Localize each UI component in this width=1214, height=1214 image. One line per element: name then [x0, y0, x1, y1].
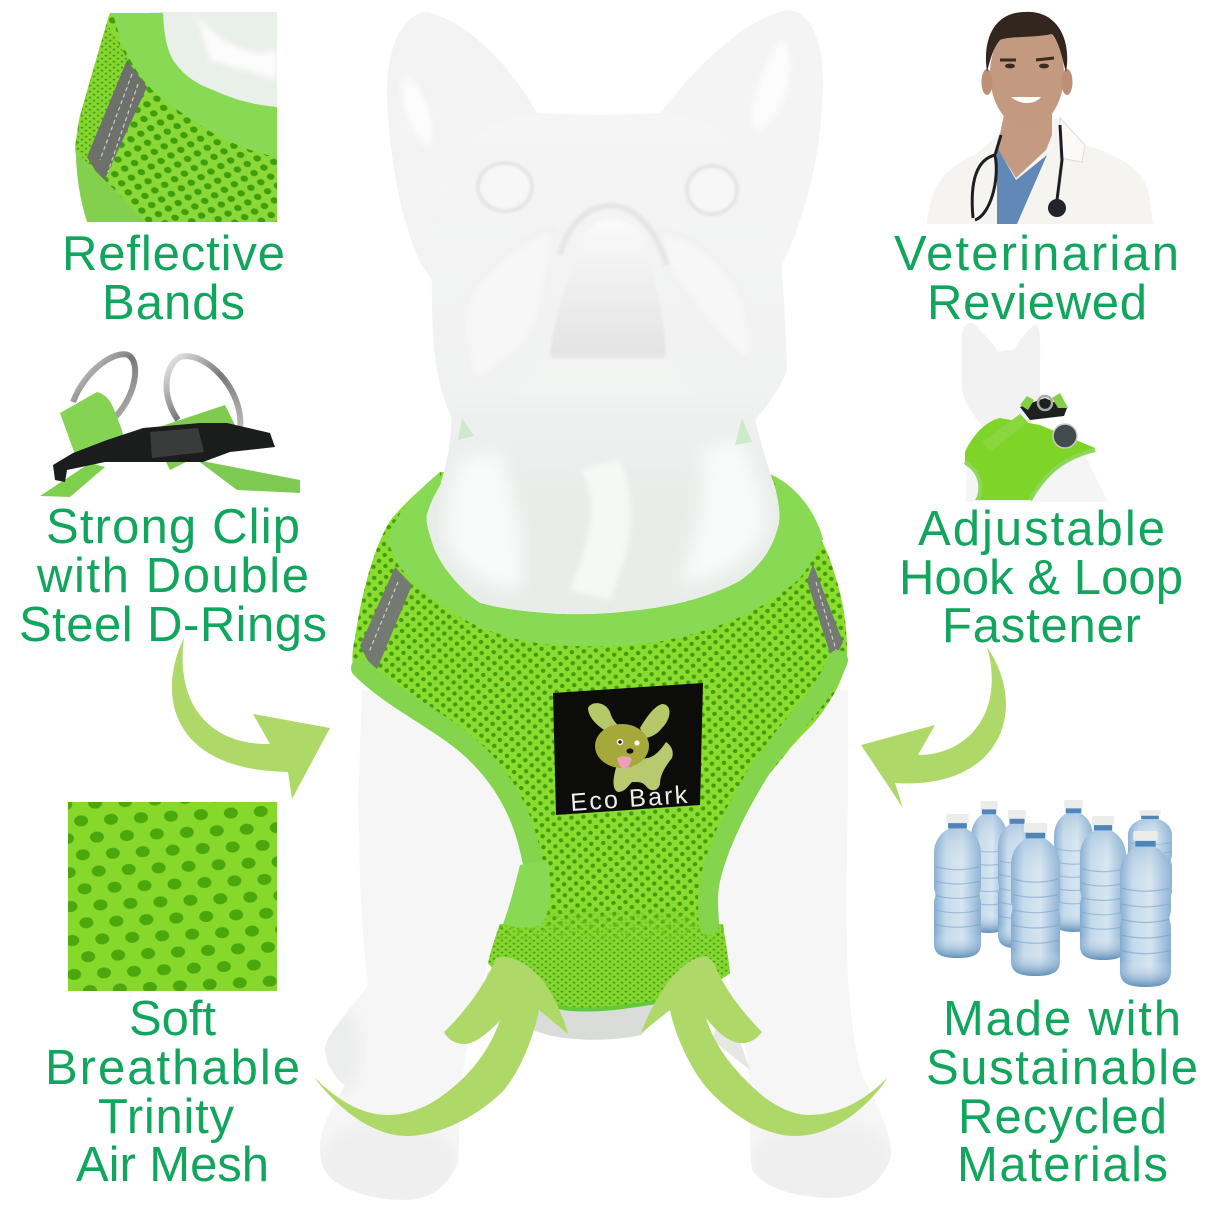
chest underside [500, 985, 680, 1040]
label: sustainable materials: Sustainable [926, 1041, 1198, 1095]
reflective strips [360, 564, 843, 674]
round badge [1053, 424, 1077, 448]
photo: small dog with fastener [962, 323, 1108, 502]
mesh body [352, 472, 847, 1010]
strap and clip [982, 414, 1028, 452]
arrow: mesh to harness [314, 957, 568, 1136]
label: air mesh: Breathable [45, 1041, 300, 1095]
white coat [927, 118, 1153, 224]
label: strong clip: Steel D-Rings [19, 598, 327, 652]
label: strong clip: with Double [36, 549, 309, 603]
neck inside collar [426, 395, 780, 614]
label: adjustable fastener [899, 502, 1183, 653]
arrow: strong clip to harness [172, 638, 330, 799]
label: air mesh: Air Mesh [76, 1138, 269, 1192]
blue scrubs [997, 147, 1047, 224]
fine lower mesh [488, 906, 730, 1010]
photo: veterinarian [927, 12, 1153, 224]
small harness [965, 418, 1095, 500]
label: air mesh: Trinity [98, 1090, 234, 1144]
photo: air mesh close-up [68, 802, 277, 991]
black buckle [53, 423, 275, 482]
label: adjustable fastener: Adjustable [918, 502, 1165, 556]
green straps [60, 392, 123, 452]
label: reflective bands [62, 227, 285, 330]
puppy logo [588, 703, 673, 792]
label: reflective bands: Reflective [62, 227, 285, 281]
fleece collar [387, 472, 823, 646]
bottom hem [530, 986, 705, 1010]
label: adjustable fastener: Hook & Loop [899, 551, 1183, 605]
face [990, 34, 1064, 116]
label: adjustable fastener: Fastener [942, 599, 1141, 653]
label: strong clip: Strong Clip [46, 500, 300, 554]
label: air mesh [45, 992, 300, 1192]
label: veterinarian reviewed [894, 227, 1179, 330]
arrow: fastener to harness [861, 647, 1006, 808]
fleece flap [503, 860, 550, 927]
dog statue [316, 10, 896, 1210]
D-rings [73, 354, 240, 430]
ears [387, 10, 823, 293]
arrow: recycled to harness [641, 956, 888, 1136]
label: veterinarian reviewed: Reviewed [927, 276, 1147, 330]
brand patch [553, 683, 703, 817]
eyes [478, 163, 737, 214]
photo: buckle and steel D-rings [40, 354, 300, 497]
stethoscope [972, 125, 1062, 220]
harness [352, 395, 847, 1010]
label: air mesh: Soft [129, 992, 216, 1046]
whisker pads [465, 230, 750, 380]
label: strong clip [19, 500, 327, 652]
label: sustainable materials: Materials [957, 1138, 1168, 1192]
fleece trim [361, 660, 838, 925]
photo: reflective band close-up [75, 12, 277, 222]
head [432, 113, 787, 430]
statue body and legs [316, 690, 896, 1210]
brows, eyes and smile [1000, 58, 1054, 60]
hair [986, 12, 1067, 72]
photo: recycled water bottles [934, 800, 1172, 987]
brand name: Eco Bark [569, 781, 689, 817]
muzzle [550, 219, 666, 358]
label: veterinarian reviewed: Veterinarian [894, 227, 1179, 281]
label: reflective bands: Bands [102, 276, 245, 330]
label: sustainable materials: Made with [943, 992, 1181, 1046]
neck [997, 110, 1052, 178]
label: sustainable materials [926, 992, 1198, 1192]
small dog statue [962, 323, 1040, 430]
label: sustainable materials: Recycled [958, 1090, 1167, 1144]
